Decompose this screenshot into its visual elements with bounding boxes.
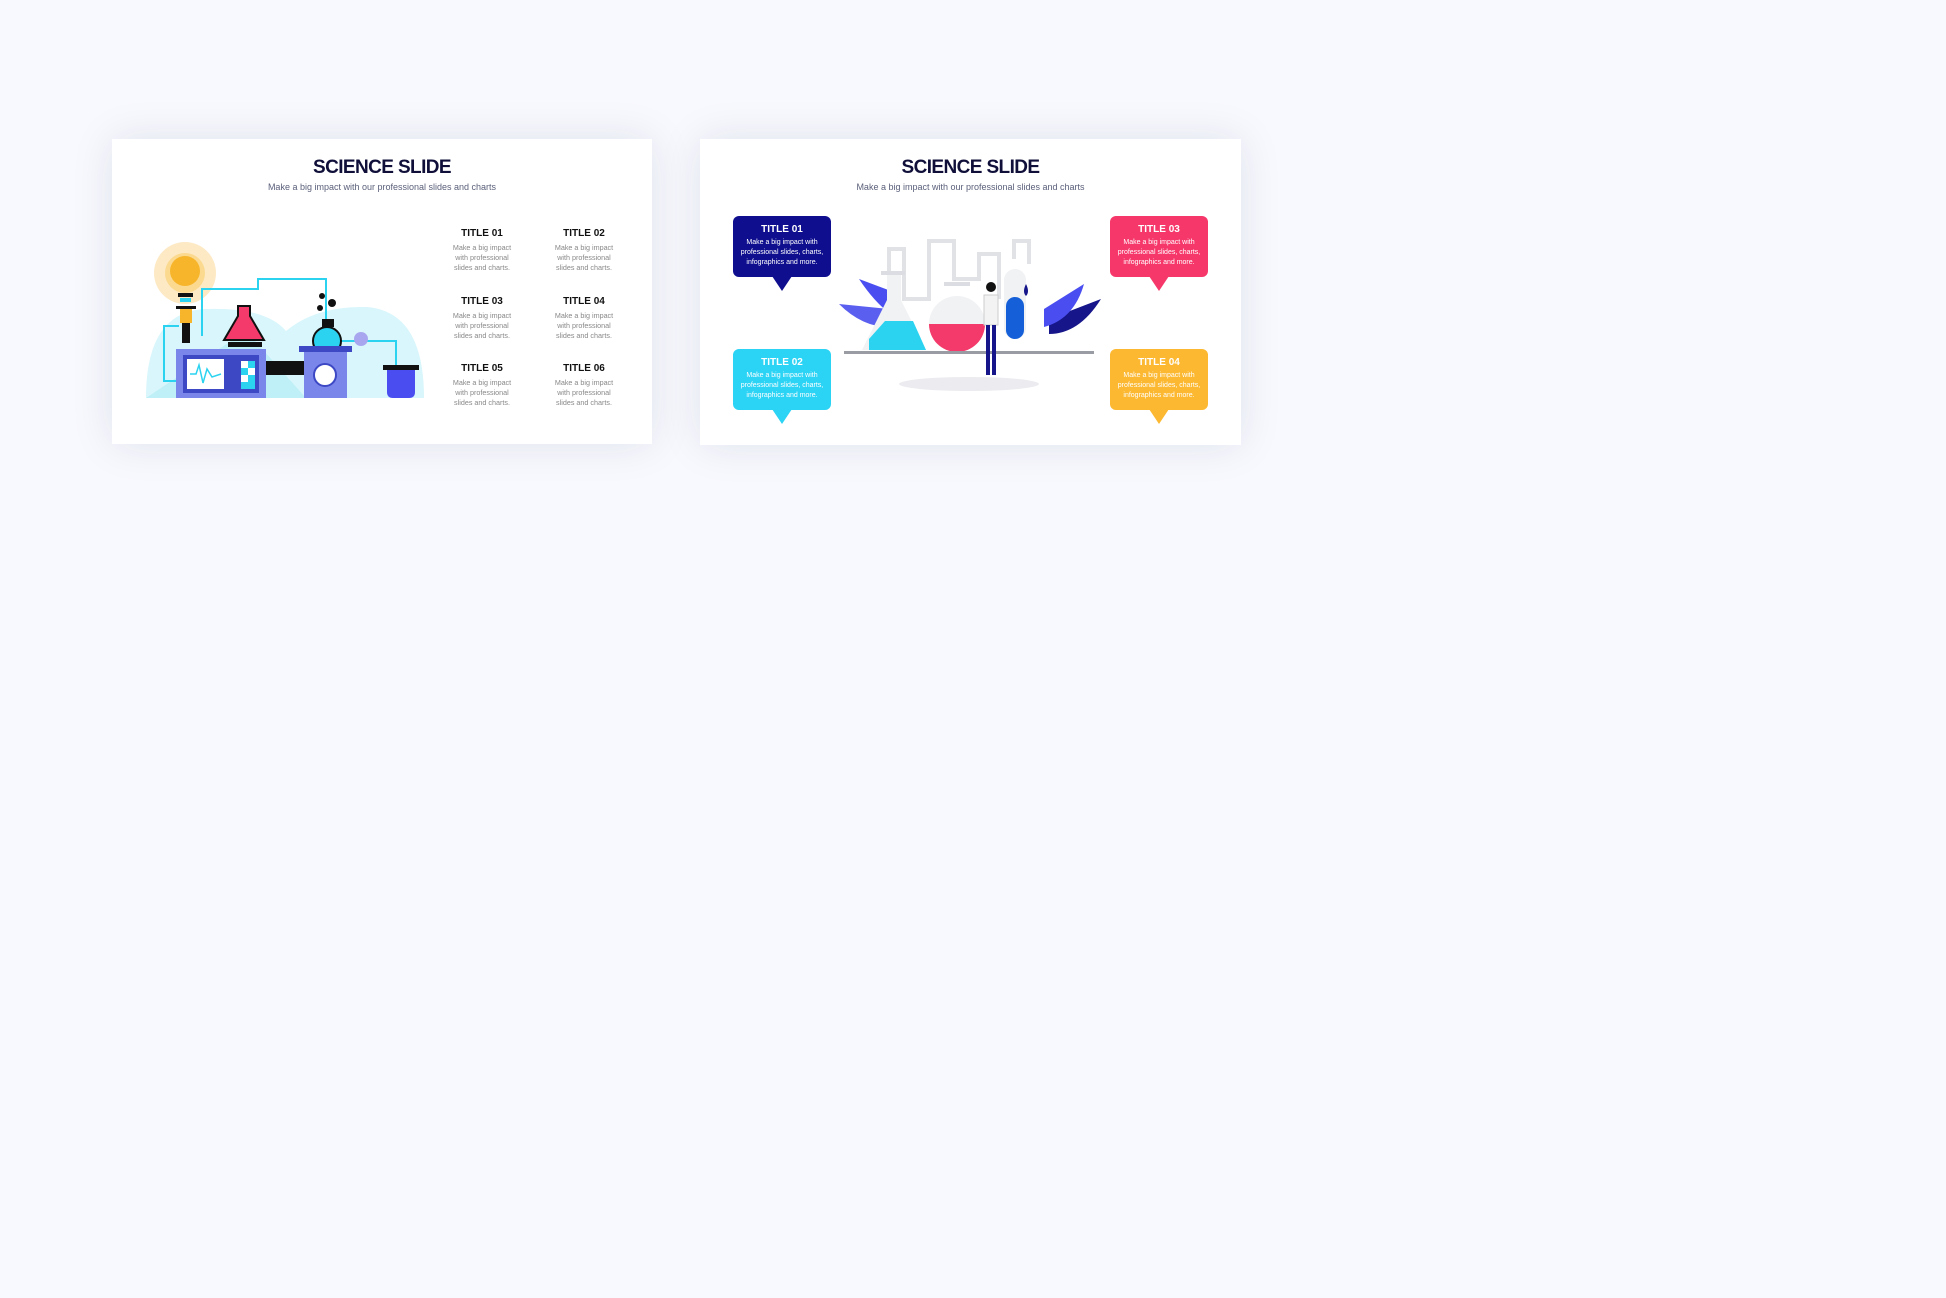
panel: left slide: TITLE 06 [563, 363, 605, 374]
callout: title 04 [1110, 349, 1208, 410]
illustration: lab equipment [146, 242, 424, 398]
callout: title 04: Make a big impact with [1123, 372, 1195, 379]
subtitle: Make a big impact with our professional slides and charts [268, 182, 496, 192]
panel: left slide: Make a big impact [555, 243, 613, 252]
panel: left slide: with professional [557, 253, 611, 262]
callout: title 01: professional slides, charts, [741, 249, 823, 256]
title: SCIENCE SLIDE [902, 157, 1039, 178]
panel: left slide: slides and charts. [454, 331, 510, 340]
panel: left slide: TITLE 03 [461, 296, 503, 307]
callout: title 04: infographics and more. [1123, 392, 1195, 399]
callout: title 04: professional slides, charts, [1118, 382, 1200, 389]
panel: left slide: TITLE 05 [461, 363, 503, 374]
callout: title 03: TITLE 03 [1138, 224, 1180, 235]
panel: left slide: Make a big impact [555, 311, 613, 320]
callout: title 03: professional slides, charts, [1118, 249, 1200, 256]
illustration: flasks and scientist [839, 239, 1101, 391]
callout: title 02: TITLE 02 [761, 357, 803, 368]
callout: title 02: infographics and more. [746, 392, 818, 399]
panel: left slide: with professional [455, 321, 509, 330]
text grid [453, 228, 512, 272]
panel: left slide: TITLE 02 [563, 228, 605, 239]
callout: title 01: infographics and more. [746, 259, 818, 266]
callout: title 03: infographics and more. [1123, 259, 1195, 266]
panel: right slide [700, 139, 1241, 445]
text grid: slides and charts. [454, 263, 510, 272]
text grid: TITLE 01 [461, 228, 503, 239]
panel: left slide [112, 139, 652, 444]
callout: title 01: Make a big impact with [746, 239, 818, 246]
callout: title 01 [733, 216, 831, 277]
callout: title 01: TITLE 01 [761, 224, 803, 235]
text grid: Make a big impact [453, 243, 511, 252]
panel: left slide: Make a big impact [453, 378, 511, 387]
callout: title 03 [1110, 216, 1208, 277]
panel: left slide: slides and charts. [454, 398, 510, 407]
panel: left slide: with professional [557, 388, 611, 397]
panel: left slide: with professional [455, 388, 509, 397]
callout: title 03: Make a big impact with [1123, 239, 1195, 246]
title: SCIENCE SLIDE [313, 157, 451, 178]
subtitle: Make a big impact with our professional slides and charts [856, 182, 1085, 192]
panel: left slide: with professional [557, 321, 611, 330]
callout: title 04: TITLE 04 [1138, 357, 1180, 368]
panel: left slide: Make a big impact [555, 378, 613, 387]
callout: title 02: Make a big impact with [746, 372, 818, 379]
panel: left slide: Make a big impact [453, 311, 511, 320]
panel: left slide: slides and charts. [556, 398, 612, 407]
text grid: with professional [455, 253, 509, 262]
callout: title 02 [733, 349, 831, 410]
panel: left slide: slides and charts. [556, 331, 612, 340]
callout: title 02: professional slides, charts, [741, 382, 823, 389]
panel: left slide: TITLE 04 [563, 296, 605, 307]
panel: left slide: slides and charts. [556, 263, 612, 272]
